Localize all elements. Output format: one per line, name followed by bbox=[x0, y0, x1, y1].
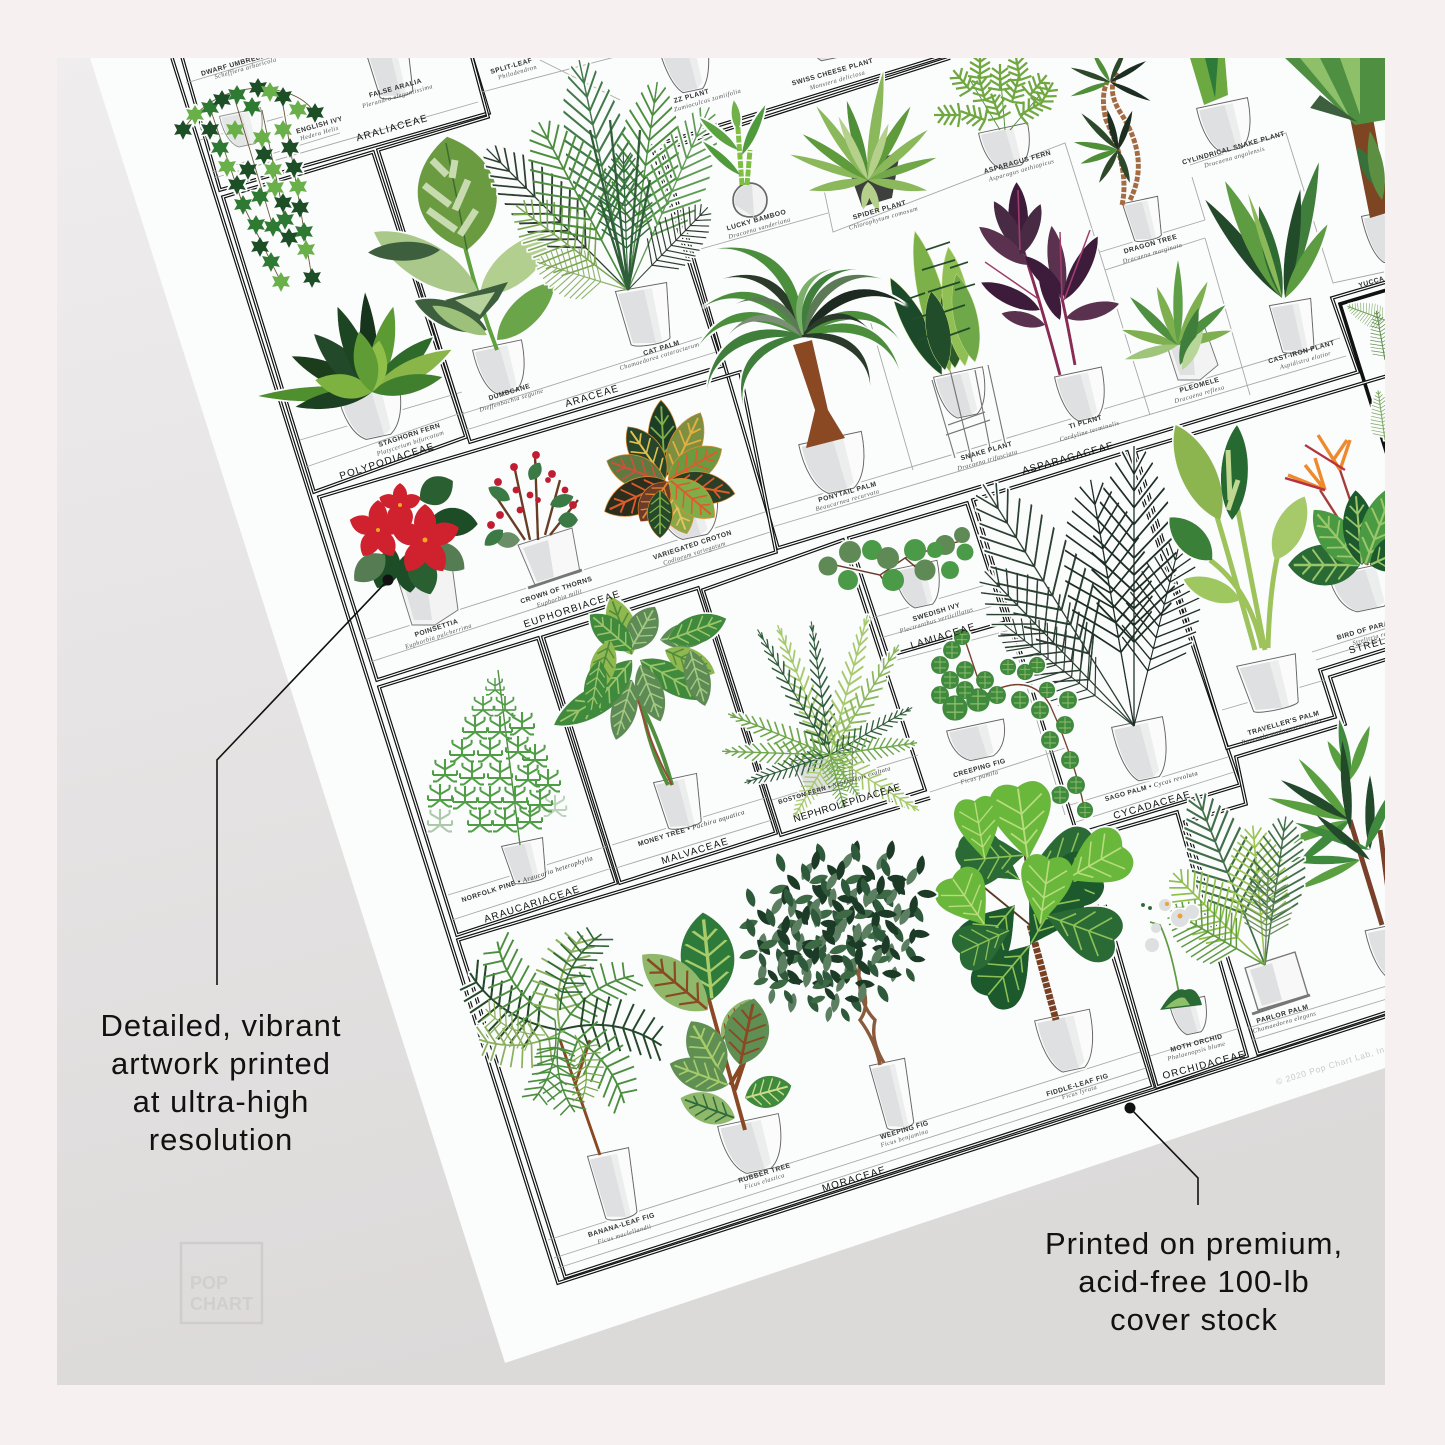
labels: Araceae: ARACEAE bbox=[564, 383, 621, 410]
labels: Orchidaceae: Phalaenopsis blume bbox=[1166, 1040, 1226, 1063]
plant: pleomele bbox=[1121, 260, 1232, 380]
labels: Moraceae: BANANA-LEAF FIG bbox=[587, 1212, 656, 1239]
labels: Strelitziaceae: TRAVELLER'S PALM bbox=[1247, 710, 1320, 737]
labels: Moraceae bbox=[587, 1073, 1109, 1246]
labels: Asparagaceae: Dracaena angolensis bbox=[1202, 145, 1266, 170]
labels: Araceae: Monstera deliciosa bbox=[808, 69, 866, 92]
labels: Asparagaceae: Cordyline terminalis bbox=[1059, 420, 1120, 443]
labels: Euphorbiaceae: EUPHORBIACEAE bbox=[522, 589, 622, 630]
panel: Araliaceae frame bbox=[180, 40, 489, 190]
labels: Asparagaceae: YUCCA bbox=[1358, 276, 1385, 290]
labels: Moraceae: WEEPING FIG bbox=[880, 1120, 930, 1141]
labels: Orchidaceae: ORCHIDACEAE bbox=[1161, 1049, 1247, 1082]
labels: Nephrolepidaceae: BOSTON FERN • Nephrolepis exaltata bbox=[777, 765, 892, 806]
labels: Asparagaceae: ASPARAGACEAE bbox=[1021, 440, 1116, 477]
labels: Araliaceae: FALSE ARALIA bbox=[368, 78, 423, 99]
plant: staghorn fern bbox=[258, 292, 456, 443]
labels: Euphorbiaceae bbox=[403, 530, 733, 651]
labels: Strelitziaceae: Strelitzia reginae bbox=[1352, 626, 1403, 647]
panel: right edge frame bbox=[1338, 288, 1385, 454]
labels: Orchidaceae bbox=[1161, 1033, 1247, 1082]
labels: Araceae: Philodendron bbox=[496, 64, 538, 82]
labels: Orchidaceae: MOTH ORCHID bbox=[1170, 1033, 1223, 1054]
labels: Moraceae: Ficus benjamina bbox=[879, 1128, 929, 1149]
plant: spider plant bbox=[789, 70, 938, 214]
callout text: artwork: artwork printed bbox=[111, 1046, 331, 1081]
labels: Araceae: ZZ PLANT bbox=[673, 88, 710, 105]
labels: Araliaceae: DWARF UMBRELLA bbox=[200, 51, 271, 78]
labels: Araceae: Dieffenbachia seguine bbox=[478, 387, 545, 414]
labels: Araucariaceae: ARAUCARIACEAE bbox=[483, 884, 582, 925]
labels: Araliaceae: ARALIACEAE bbox=[355, 113, 430, 144]
labels: Cycadaceae bbox=[953, 758, 1199, 822]
labels: Moraceae: FIDDLE-LEAF FIG bbox=[1046, 1073, 1109, 1098]
plant: boston fern bbox=[722, 612, 926, 823]
labels: Asparagaceae: ASPARAGUS FERN bbox=[983, 150, 1052, 176]
labels: Araceae: SWISS CHEESE PLANT bbox=[791, 57, 874, 88]
panel: Cycadaceae frame bbox=[897, 452, 1240, 834]
labels: Polypodiaceae bbox=[338, 422, 445, 482]
panel: Malvaceae frame bbox=[543, 588, 776, 883]
logo bbox=[181, 1243, 262, 1323]
labels: Euphorbiaceae: Euphorbia milii bbox=[535, 588, 583, 610]
plant: money tree bbox=[547, 592, 731, 832]
panel: Strelitziaceae frame bbox=[1135, 372, 1400, 748]
labels: Malvaceae: MALVACEAE bbox=[660, 836, 730, 867]
labels: Asparagaceae: SPIDER PLANT bbox=[852, 199, 907, 222]
labels: Araliaceae: ENGLISH IVY bbox=[296, 116, 344, 136]
panel: Araceae frame bbox=[376, 58, 943, 444]
plant: cat palm bbox=[482, 60, 718, 347]
labels: Lamiaceae: Plectranthus verticillatus bbox=[898, 606, 974, 635]
plant: asparagus fern bbox=[934, 58, 1058, 170]
plant: poinsettia bbox=[346, 469, 479, 625]
plant: lady palm bbox=[1267, 718, 1430, 985]
labels: Araliaceae bbox=[200, 51, 434, 144]
labels: parlor palm: Chamaedorea elegans bbox=[1252, 1010, 1317, 1035]
panel: Asparagaceae frame bbox=[662, 58, 1400, 548]
plant: fiddle-leaf fig bbox=[929, 779, 1139, 1076]
labels: Strelitziaceae bbox=[1240, 615, 1445, 747]
labels: Moraceae: RUBBER TREE bbox=[738, 1162, 791, 1185]
labels: Asparagaceae bbox=[726, 130, 1385, 513]
labels: Lamiaceae: LAMIACEAE bbox=[909, 621, 977, 652]
labels: Araliaceae: Plerandra elegantissima bbox=[360, 83, 434, 110]
labels: Araceae: Zamioculcas zamiifolia bbox=[673, 88, 742, 114]
labels: Asparagaceae: Dracaena marginata bbox=[1121, 242, 1183, 266]
labels: Asparagaceae: CAST-IRON PLANT bbox=[1268, 340, 1336, 365]
labels: Cycadaceae: CYCADACEAE bbox=[1112, 789, 1192, 822]
labels: Araliaceae: Hedera Helix bbox=[298, 125, 340, 143]
labels: Euphorbiaceae: Euphorbia pulcherrima bbox=[403, 622, 473, 651]
labels: Nephrolepidaceae: NEPHROLEPIDACEAE bbox=[792, 782, 902, 825]
labels: Moraceae: Ficus elastica bbox=[743, 1172, 786, 1191]
plant: lucky bamboo bbox=[697, 100, 769, 217]
plant: crown of thorns bbox=[481, 451, 582, 588]
labels: Euphorbiaceae: Codiaeum variegatum bbox=[662, 540, 727, 567]
labels: Araliaceae: Schefflera arboricola bbox=[214, 56, 277, 81]
labels: Euphorbiaceae: POINSETTIA bbox=[414, 618, 459, 639]
logo: CHART bbox=[190, 1294, 253, 1314]
labels: Strelitziaceae: Ravenala madagascariensis bbox=[1240, 717, 1323, 747]
labels: Asparagaceae: LUCKY BAMBOO bbox=[726, 209, 787, 232]
plant: dumbcane bbox=[368, 136, 554, 394]
labels: Asparagaceae: Beaucarnea recurvata bbox=[815, 488, 880, 513]
plant: yucca bbox=[1285, 58, 1385, 264]
labels: Araucariaceae: NORFOLK PINE • Araucaria heterophylla bbox=[461, 855, 594, 904]
labels: Strelitziaceae: BIRD OF PARADISE bbox=[1336, 615, 1407, 642]
plant: banana-leaf fig bbox=[460, 923, 676, 1223]
labels: Moraceae: MORACEAE bbox=[821, 1165, 888, 1195]
callout text: artwork: resolution bbox=[149, 1122, 293, 1157]
panel: parlor palm frame bbox=[1185, 655, 1400, 1054]
labels: Asparagaceae: PONYTAIL PALM bbox=[818, 481, 878, 504]
labels: Moraceae: Ficus lyrata bbox=[1060, 1084, 1098, 1102]
plant: ponytail palm bbox=[696, 244, 910, 497]
panel: Araucariaceae frame bbox=[379, 638, 616, 935]
callout text: artwork: at ultra-high bbox=[133, 1084, 309, 1119]
labels: Asparagaceae: Aspidistra elatior bbox=[1278, 350, 1332, 372]
panel: Euphorbiaceae frame bbox=[319, 372, 776, 680]
panel: Moraceae frame bbox=[458, 798, 1153, 1277]
labels: Polypodiaceae: STAGHORN FERN bbox=[378, 422, 441, 449]
plant: right edge fern bbox=[1347, 301, 1385, 442]
panel: Polypodiaceae frame bbox=[223, 152, 466, 492]
plant: swedish ivy bbox=[818, 527, 974, 611]
panel: Orchidaceae frame bbox=[1087, 812, 1247, 1087]
labels: Malvaceae: MONEY TREE • Pachira aquatica bbox=[637, 809, 746, 848]
pots top row bbox=[367, 58, 837, 100]
callout text: paper: acid-free 100-lb bbox=[1078, 1264, 1310, 1299]
labels: Cycadaceae: CREEPING FIG bbox=[953, 758, 1007, 779]
labels: Lamiaceae: SWEDISH IVY bbox=[912, 602, 961, 623]
copyright note: © 2020 Pop Chart Lab, Inc bbox=[1275, 1043, 1391, 1087]
plant: parlor palm bbox=[1152, 781, 1313, 1014]
labels: Asparagaceae: CYLINDRICAL SNAKE PLANT bbox=[1181, 130, 1286, 167]
labels: Malvaceae bbox=[637, 809, 746, 867]
labels: Araceae: SPLIT-LEAF bbox=[490, 57, 533, 76]
plant: bird of paradise bbox=[1285, 435, 1427, 616]
labels: Araceae bbox=[478, 57, 874, 414]
labels: Asparagaceae: Dracaena reflexa bbox=[1173, 384, 1225, 405]
plant: ti plant bbox=[974, 182, 1121, 424]
plant: norfolk pine bbox=[428, 670, 566, 887]
labels: Euphorbiaceae: CROWN OF THORNS bbox=[520, 576, 593, 606]
labels: Asparagaceae: DRAGON TREE bbox=[1123, 234, 1178, 256]
callout text: paper: Printed on premium, bbox=[1045, 1226, 1343, 1261]
callout line: artwork bbox=[217, 574, 394, 985]
labels: Polypodiaceae: POLYPODIACEAE bbox=[338, 441, 436, 482]
labels: Araceae: Chamaedorea cataractarum bbox=[619, 341, 700, 372]
labels: Polypodiaceae: Platycerium bifurcatum bbox=[375, 429, 445, 458]
callout line: paper bbox=[1124, 1102, 1198, 1205]
labels: Araceae: DUMBCANE bbox=[488, 383, 531, 402]
callout text: paper: cover stock bbox=[1110, 1302, 1278, 1337]
plant: variegated croton bbox=[597, 399, 738, 543]
logo: POP bbox=[190, 1273, 228, 1293]
labels: Cycadaceae: Ficus pumila bbox=[959, 769, 999, 787]
labels: Strelitziaceae: STRELITZIACEAE bbox=[1348, 619, 1445, 657]
panel: Lamiaceae frame bbox=[849, 503, 1006, 656]
labels: Nephrolepidaceae bbox=[777, 765, 902, 825]
labels: Araceae: CAT PALM bbox=[643, 340, 681, 357]
outer frame bbox=[172, 58, 1400, 1283]
labels: Asparagaceae: Dracaena sanderiana bbox=[727, 216, 792, 241]
labels: Asparagaceae: SNAKE PLANT bbox=[960, 441, 1014, 462]
plant: creeping fig bbox=[931, 629, 1093, 818]
plant: cast-iron plant bbox=[1199, 160, 1333, 356]
callout text: artwork: Detailed, vibrant bbox=[100, 1008, 342, 1043]
plant: snake plant bbox=[880, 228, 1005, 462]
labels: Asparagaceae: TI PLANT bbox=[1068, 414, 1103, 431]
labels: Lamiaceae bbox=[898, 602, 977, 652]
plant: rubber tree bbox=[629, 910, 795, 1177]
labels: Asparagaceae: Dracaena trifasciata bbox=[956, 449, 1019, 473]
plant: moth orchid bbox=[1141, 899, 1212, 1037]
labels: Asparagaceae: PLEOMELE bbox=[1179, 377, 1220, 395]
labels: Asparagaceae: Chlorophytum comosum bbox=[848, 205, 919, 232]
labels: Moraceae: Ficus maclellandii bbox=[596, 1223, 652, 1246]
labels: Asparagaceae: Asparagus aethiopicus bbox=[987, 158, 1055, 184]
labels: parlor palm: PARLOR PALM bbox=[1256, 1004, 1309, 1025]
plant: dragon tree bbox=[1070, 58, 1164, 242]
plant: English ivy bbox=[174, 78, 324, 292]
labels: Araucariaceae bbox=[461, 855, 594, 925]
plant: weeping fig bbox=[738, 840, 937, 1133]
plant: cylindrical snake plant bbox=[1190, 58, 1250, 154]
panel: Nephrolepidaceae frame bbox=[703, 540, 925, 835]
plant: traveller's palm bbox=[1160, 418, 1317, 716]
plant: sago palm bbox=[947, 446, 1216, 784]
labels: Cycadaceae: SAGO PALM • Cycas revoluta bbox=[1104, 770, 1199, 803]
labels: Euphorbiaceae: VARIEGATED CROTON bbox=[652, 530, 733, 562]
